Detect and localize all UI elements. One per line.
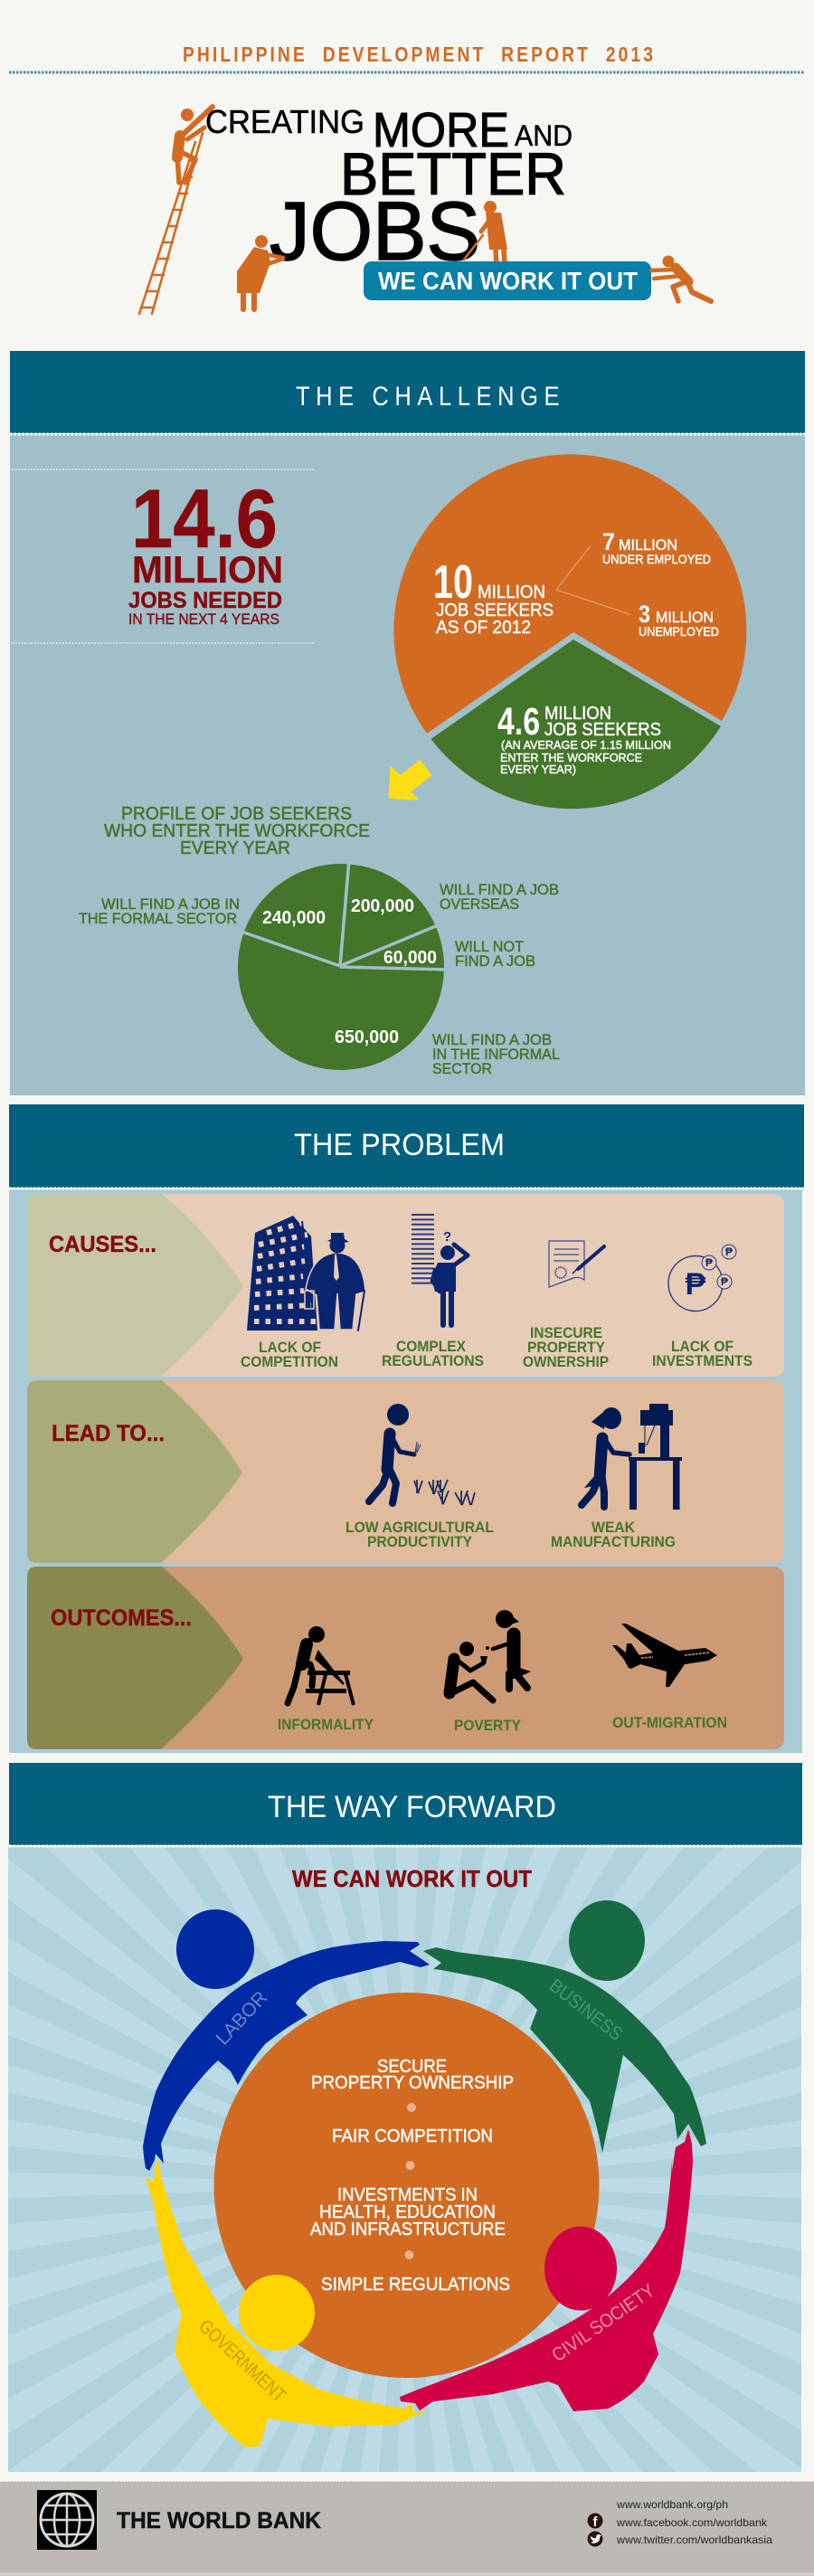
icon: carpenter at sawhorse xyxy=(288,1626,354,1705)
pie label: 4.6 million: JOB SEEKERS xyxy=(544,720,661,740)
icon: farmer and crops xyxy=(369,1404,475,1505)
title: creating: CREATING xyxy=(205,103,364,140)
label: weak manufacturing: MANUFACTURING xyxy=(551,1533,676,1550)
pie label: 3 million xyxy=(639,601,719,639)
icon: peso coins: ₱ xyxy=(725,1245,733,1258)
label: complex regulations xyxy=(382,1338,484,1369)
pie label: 4.6 million: EVERY YEAR) xyxy=(500,762,576,776)
label: will not find a job: WILL NOT xyxy=(455,938,524,955)
card: outcomes xyxy=(27,1567,784,1749)
slice value: 60,000: 60,000 xyxy=(383,948,437,968)
label: lack of competition: LACK OF xyxy=(259,1339,321,1356)
pie label: 3 million: UNEMPLOYED xyxy=(639,624,719,639)
item: investments: AND INFRASTRUCTURE xyxy=(310,2220,506,2240)
profile heading: PROFILE OF JOB SEEKERS xyxy=(121,804,352,824)
section heading: the challenge xyxy=(10,351,805,433)
label: informality: INFORMALITY xyxy=(278,1716,374,1733)
icon: climbing worker xyxy=(177,107,213,183)
label: outcomes: OUTCOMES... xyxy=(51,1605,192,1631)
label: overseas: OVERSEAS xyxy=(440,895,519,913)
link: website: www.worldbank.org/ph xyxy=(616,2498,728,2511)
pie label: 7 million: 7 xyxy=(602,528,615,555)
pie label: 7 million: MILLION xyxy=(619,536,677,554)
footer xyxy=(0,2481,814,2576)
label: poverty: POVERTY xyxy=(454,1717,522,1734)
figure: business xyxy=(423,1900,706,2153)
pie label: 10 million xyxy=(433,556,554,638)
pie label: 4.6 million: ENTER THE WORKFORCE xyxy=(500,751,642,764)
icon: confused man and barcode regulations xyxy=(423,1214,468,1325)
icon: property document and pen xyxy=(549,1241,604,1287)
item: fair competition: FAIR COMPETITION xyxy=(332,2126,493,2146)
icon: factory worker at machine xyxy=(582,1404,682,1510)
label: will not find a job xyxy=(455,938,535,970)
logo: world bank globe xyxy=(37,2490,97,2550)
icon: woman pushing letter J xyxy=(237,235,283,309)
profile heading xyxy=(104,804,370,858)
label: insecure property ownership: OWNERSHIP xyxy=(523,1353,609,1370)
icon: twitter xyxy=(588,2531,602,2547)
label: out-migration: OUT-MIGRATION xyxy=(612,1714,727,1731)
label: will not find a job: FIND A JOB xyxy=(455,952,535,970)
title block xyxy=(205,103,573,278)
profile heading: WHO ENTER THE WORKFORCE xyxy=(104,821,370,841)
section heading: the challenge: THE CHALLENGE xyxy=(296,381,560,411)
label: labor: LABOR xyxy=(212,1987,271,2050)
pie label: 10 million: AS OF 2012 xyxy=(436,618,531,638)
section heading: the problem xyxy=(9,1104,804,1188)
tagline pill xyxy=(364,261,651,300)
item: simple regulations: SIMPLE REGULATIONS xyxy=(321,2275,510,2295)
section heading: the way forward: THE WAY FORWARD xyxy=(268,1790,556,1824)
pie label: 7 million: UNDER EMPLOYED xyxy=(602,552,711,566)
title: more: MORE xyxy=(373,103,509,157)
icon: person giving to beggar xyxy=(450,1610,531,1700)
item: investments: HEALTH, EDUCATION xyxy=(319,2202,496,2222)
item: secure property ownership: SECURE xyxy=(377,2057,447,2077)
label: overseas: WILL FIND A JOB xyxy=(440,881,559,898)
card: causes xyxy=(27,1194,784,1377)
icon: peso coins: ₱ xyxy=(705,1256,713,1269)
link: twitter: www.twitter.com/worldbankasia xyxy=(616,2533,772,2546)
stat: 14.6 million jobs needed: JOBS NEEDED xyxy=(128,588,282,613)
label: formal sector: THE FORMAL SECTOR xyxy=(79,910,237,927)
icon: worker pushing pill xyxy=(651,255,711,301)
profile heading: EVERY YEAR xyxy=(180,838,290,858)
figure: civil society xyxy=(400,2129,693,2411)
label: lead to: LEAD TO... xyxy=(52,1421,165,1446)
title: jobs: JOBS xyxy=(270,185,480,278)
pie slice: 10 million job seekers xyxy=(393,454,746,734)
icon: peso coins: ₱ xyxy=(721,1275,728,1288)
stat: 14.6 million jobs needed: MILLION xyxy=(132,548,283,591)
pie label: 10 million: MILLION xyxy=(478,582,545,602)
label: complex regulations: COMPLEX xyxy=(396,1338,467,1355)
label: lack of competition xyxy=(241,1339,338,1370)
section heading: the problem: THE PROBLEM xyxy=(294,1128,505,1162)
label: formal sector xyxy=(79,895,240,927)
figure: labor xyxy=(143,1909,430,2171)
label: insecure property ownership xyxy=(523,1324,609,1370)
title: and: AND xyxy=(515,119,573,152)
slice value: 200,000: 200,000 xyxy=(351,896,414,916)
label: insecure property ownership: PROPERTY xyxy=(527,1339,606,1356)
label: informal sector xyxy=(432,1031,560,1077)
label: informal sector: IN THE INFORMAL xyxy=(432,1046,560,1063)
pie label: 7 million xyxy=(602,528,711,566)
icon: confused man and barcode regulations: ? xyxy=(443,1229,451,1245)
label: low agricultural productivity: PRODUCTIVITY xyxy=(367,1533,473,1550)
label: government: GOVERNMENT xyxy=(194,2316,289,2406)
arrow: yellow pointer xyxy=(389,761,431,800)
label: civil society: CIVIL SOCIETY xyxy=(548,2280,658,2366)
label: business: BUSINESS xyxy=(545,1975,627,2045)
icon: worker with pole xyxy=(464,201,507,265)
card: lead to xyxy=(27,1380,784,1563)
panel: the problem xyxy=(9,1104,804,1753)
label: informal sector: SECTOR xyxy=(432,1060,492,1077)
panel: the challenge xyxy=(10,351,805,1095)
central circle xyxy=(213,1993,599,2378)
pie label: 10 million: 10 xyxy=(433,556,473,609)
pie label: 10 million: JOB SEEKERS xyxy=(436,601,554,620)
label: lack of investments xyxy=(652,1338,752,1369)
item: secure property ownership xyxy=(311,2057,514,2093)
label: formal sector: WILL FIND A JOB IN xyxy=(101,895,240,913)
pie chart: job seekers xyxy=(393,454,746,809)
pie label: 4.6 million: 4.6 xyxy=(497,700,540,743)
icon: peso coins xyxy=(668,1245,736,1312)
pie label: 4.6 million xyxy=(497,700,671,776)
pie slice: 4.6 million job seekers xyxy=(431,639,721,809)
label: low agricultural productivity: LOW AGRICULTURAL xyxy=(345,1519,494,1536)
label: weak manufacturing xyxy=(551,1519,676,1550)
slice value: 240,000: 240,000 xyxy=(262,908,326,928)
pie label: 4.6 million: (AN AVERAGE OF 1.15 MILLION xyxy=(501,738,671,752)
label: insecure property ownership: INSECURE xyxy=(530,1324,602,1341)
text: the world bank: THE WORLD BANK xyxy=(117,2508,321,2533)
pie chart: profile of job seekers xyxy=(238,859,449,1070)
item: investments xyxy=(310,2185,506,2240)
pie label: 3 million: 3 xyxy=(639,601,650,628)
label: lack of investments: LACK OF xyxy=(671,1338,734,1355)
pie label: 4.6 million: MILLION xyxy=(544,704,611,724)
label: causes: CAUSES... xyxy=(49,1232,156,1257)
subheading: we can work it out: WE CAN WORK IT OUT xyxy=(292,1865,532,1892)
icon: peso coins: ₱ xyxy=(686,1267,706,1302)
icon: ladder xyxy=(139,133,203,314)
item: secure property ownership: PROPERTY OWNERSHIP xyxy=(311,2073,514,2093)
stat: 14.6 million jobs needed: 14.6 xyxy=(131,473,278,565)
list: solutions xyxy=(310,2057,514,2295)
label: lack of competition: COMPETITION xyxy=(241,1353,338,1370)
pie label: 3 million: MILLION xyxy=(656,609,714,626)
label: complex regulations: REGULATIONS xyxy=(382,1352,484,1369)
tagline pill: WE CAN WORK IT OUT xyxy=(378,267,638,295)
stat: 14.6 million jobs needed xyxy=(128,473,283,628)
icon: facebook: f xyxy=(593,2514,599,2530)
section heading: the way forward xyxy=(9,1763,802,1845)
icon: airplane xyxy=(612,1624,717,1687)
label: lack of investments: INVESTMENTS xyxy=(652,1352,752,1369)
icon: facebook xyxy=(588,2513,602,2530)
label: weak manufacturing: WEAK xyxy=(592,1519,636,1536)
stat: 14.6 million jobs needed: IN THE NEXT 4 YEARS xyxy=(128,611,279,628)
report label: PHILIPPINE DEVELOPMENT REPORT 2013 xyxy=(183,44,653,66)
way forward ray background xyxy=(8,1847,801,2472)
title: better: BETTER xyxy=(340,140,566,207)
link: facebook: www.facebook.com/worldbank xyxy=(616,2516,768,2529)
label: low agricultural productivity xyxy=(345,1519,494,1550)
label: overseas xyxy=(440,881,559,913)
figure: government xyxy=(146,2159,429,2447)
item: investments: INVESTMENTS IN xyxy=(337,2185,478,2205)
slice value: 650,000: 650,000 xyxy=(335,1028,399,1047)
panel: the way forward xyxy=(9,1763,802,2447)
icon: building and businessman xyxy=(247,1216,365,1331)
label: informal sector: WILL FIND A JOB xyxy=(432,1031,552,1048)
links xyxy=(588,2498,772,2547)
